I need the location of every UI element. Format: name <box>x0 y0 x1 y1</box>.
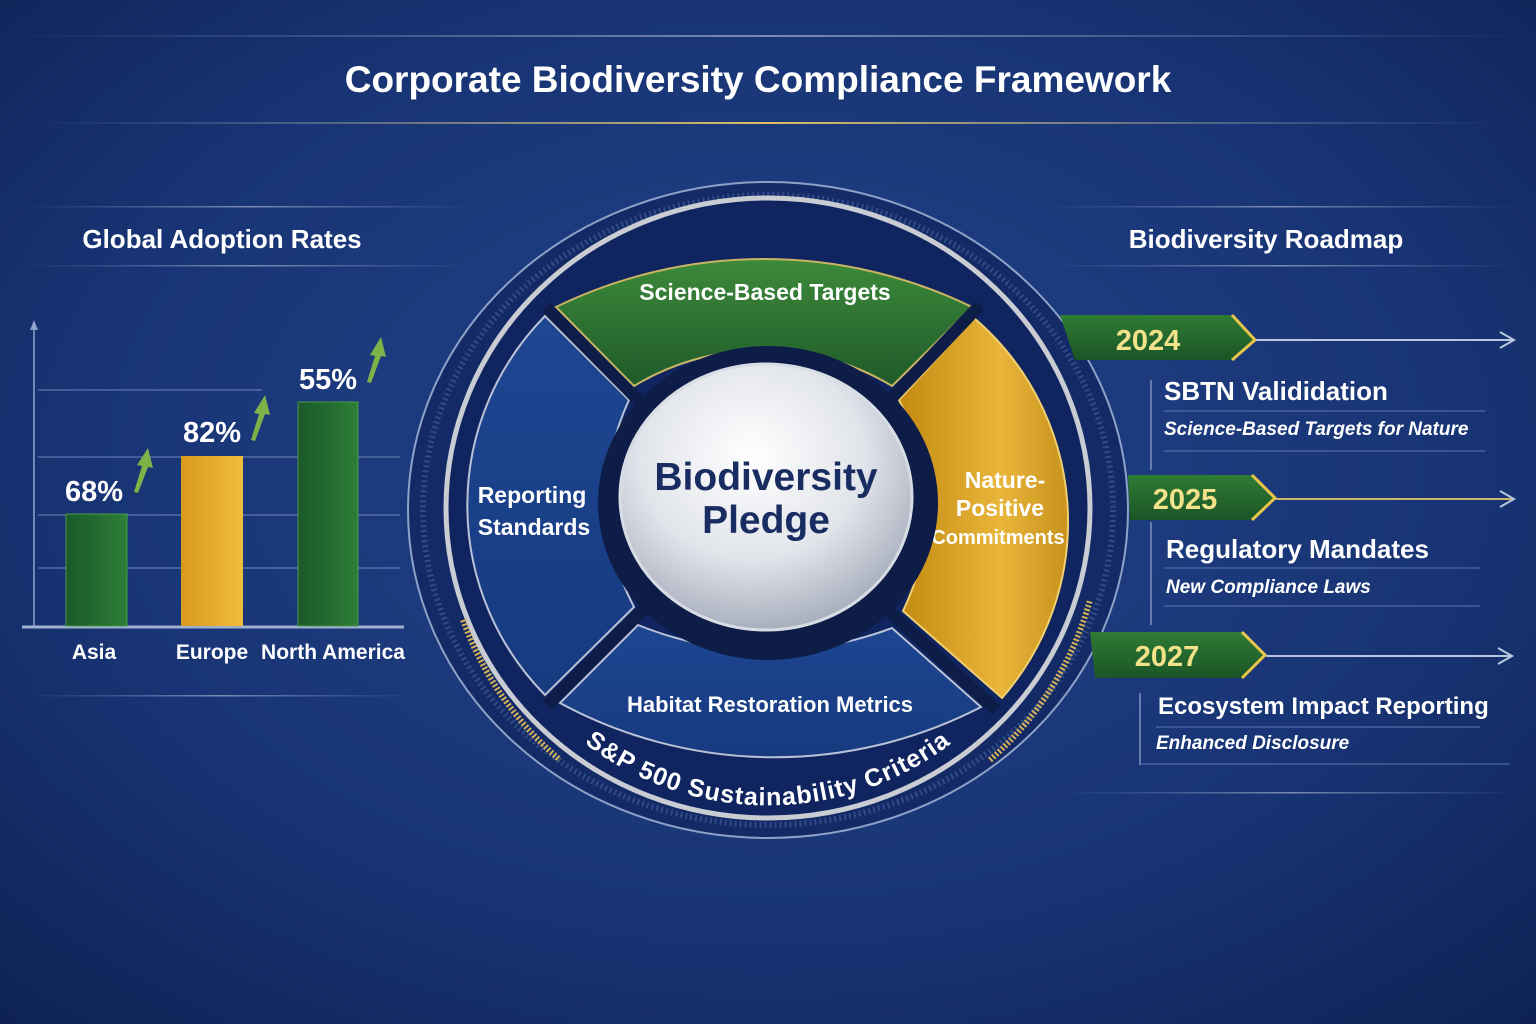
segment: nature-positive commitments: Nature- <box>965 467 1045 493</box>
segment: reporting standards: Reporting <box>478 482 586 508</box>
axis labels: North America <box>261 641 405 664</box>
center: biodiversity pledge <box>598 346 938 660</box>
timeline: 2024 <box>1060 315 1514 470</box>
title: Corporate Biodiversity Compliance Framework <box>345 59 1172 100</box>
curved label: S&P 500 criteria: S&P 500 Sustainability Criteria <box>586 732 951 806</box>
segment: reporting standards: Standards <box>478 514 590 540</box>
segment: habitat restoration metrics: Habitat Restoration Metrics <box>627 692 913 717</box>
segment: nature-positive commitments <box>899 318 1068 698</box>
timeline: 2025: 2025 <box>1153 484 1217 516</box>
axis labels <box>72 641 405 664</box>
segment: reporting standards <box>467 316 634 695</box>
heading: biodiversity roadmap: Biodiversity Roadmap <box>1129 224 1403 254</box>
outer ring <box>408 182 1128 838</box>
timeline: 2025: Regulatory Mandates <box>1166 534 1429 564</box>
central framework diagram <box>407 181 1129 839</box>
bar: Europe <box>181 456 243 626</box>
timeline: 2027 <box>1090 632 1512 765</box>
segment: habitat restoration metrics <box>560 625 981 757</box>
center: biodiversity pledge: Biodiversity <box>654 456 878 499</box>
heading: global adoption rates: Global Adoption Rates <box>82 224 362 254</box>
value labels: 55% <box>299 364 357 396</box>
axis labels: Asia <box>72 641 116 664</box>
timeline: 2024: SBTN Valididation <box>1164 376 1388 406</box>
segment: science-based targets <box>556 259 972 386</box>
axis labels: Europe <box>176 641 248 664</box>
bar chart: adoption rates <box>20 320 420 696</box>
icon: growth arrows <box>134 337 386 493</box>
timeline: 2024: 2024 <box>1116 325 1180 357</box>
segment: science-based targets: Science-Based Targets <box>639 279 891 305</box>
bar: North America <box>298 402 358 626</box>
timeline: 2027: 2027 <box>1135 641 1199 673</box>
timeline: 2024: Science-Based Targets for Nature <box>1164 419 1469 440</box>
center: biodiversity pledge: Pledge <box>702 499 830 542</box>
bar: Asia <box>66 514 127 626</box>
timeline: 2027: Enhanced Disclosure <box>1156 733 1350 754</box>
dividers <box>546 305 996 710</box>
segment: nature-positive commitments: Commitments <box>931 527 1065 549</box>
value labels: 68% <box>65 476 123 508</box>
segment: nature-positive commitments: Positive <box>956 495 1044 521</box>
timeline: 2027: Ecosystem Impact Reporting <box>1158 693 1489 720</box>
value labels: 82% <box>183 417 241 449</box>
timeline: 2025: New Compliance Laws <box>1166 577 1371 598</box>
timeline: 2025 <box>1128 475 1514 625</box>
value labels <box>65 364 357 508</box>
